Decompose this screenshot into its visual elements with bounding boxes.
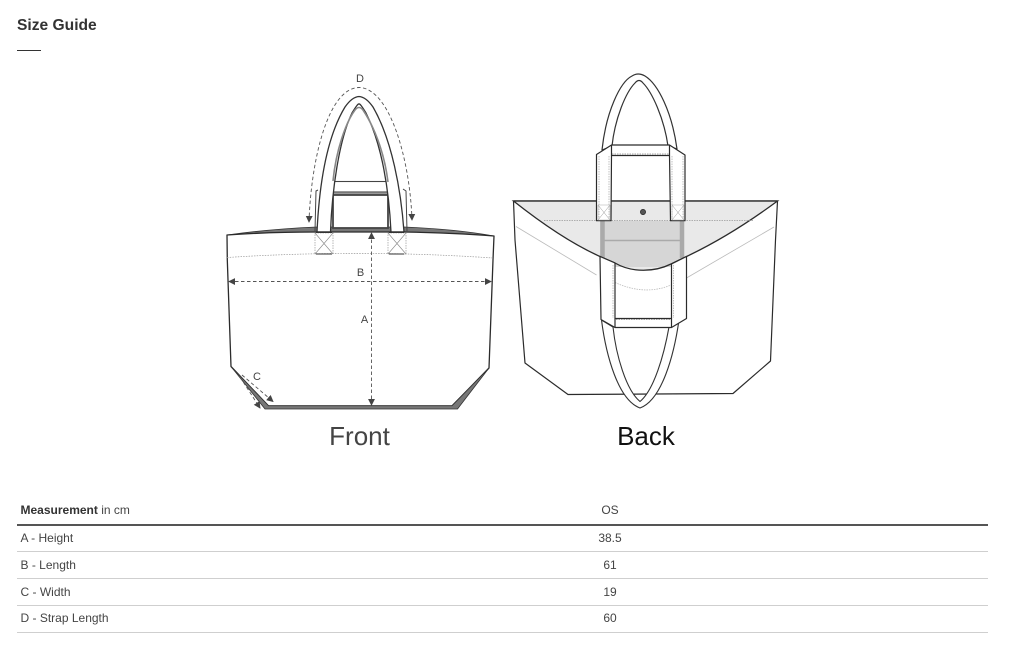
value: 61: 61 xyxy=(603,558,617,572)
header rule xyxy=(17,524,988,526)
row: B - Length: B - Length xyxy=(20,558,76,572)
row: A - Height: A - Height xyxy=(20,531,73,545)
value: 38.5: 38.5 xyxy=(598,531,622,545)
back inner lining xyxy=(514,201,778,270)
table header: OS: OS xyxy=(601,503,619,517)
front bag body xyxy=(227,232,494,406)
label: Front: Front xyxy=(329,421,391,451)
front stitch line xyxy=(227,253,493,258)
back lower strap xyxy=(600,256,686,328)
value: 19: 19 xyxy=(603,585,617,599)
back view of tote bag xyxy=(514,74,778,451)
measurement labels: A xyxy=(361,314,369,326)
front handle xyxy=(317,96,404,232)
front back-panel top band xyxy=(227,227,494,236)
front bottom gusset xyxy=(231,366,489,409)
title underline xyxy=(17,50,41,51)
front view of tote bag xyxy=(227,73,494,451)
measurement arrows xyxy=(229,88,491,408)
back snap button xyxy=(640,209,646,215)
row: D - Strap Length: D - Strap Length xyxy=(20,611,109,625)
row: C - Width: C - Width xyxy=(20,585,71,599)
value: 60: 60 xyxy=(603,611,617,625)
back lower handle xyxy=(602,320,679,408)
measurement labels xyxy=(253,73,369,383)
measurement labels: D xyxy=(356,73,364,85)
back bag body xyxy=(514,201,778,394)
measurement labels: B xyxy=(357,267,364,279)
front rear strap panel xyxy=(315,182,407,231)
table header: Measurement in cm: Measurement in cm xyxy=(20,503,130,517)
back upper strap xyxy=(596,145,685,221)
back seam lines xyxy=(516,220,774,290)
measurement labels: C xyxy=(253,371,261,383)
back inner pocket xyxy=(600,221,684,267)
title: Size Guide: Size Guide xyxy=(17,17,97,34)
back flap edge xyxy=(514,201,778,270)
label: Back: Back xyxy=(617,421,676,451)
front strap stitching patches xyxy=(315,233,406,254)
back upper handle xyxy=(602,74,677,150)
